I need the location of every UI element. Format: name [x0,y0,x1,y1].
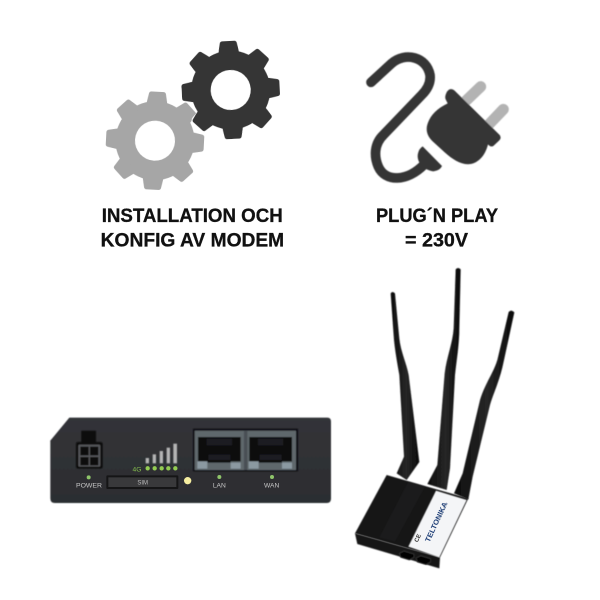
heading: plug and play: = 230V [405,230,468,252]
SIM slot [106,475,178,489]
label POWER: POWER [76,483,102,490]
cord end cap [418,146,442,171]
power connector [76,431,103,469]
white label [408,491,467,557]
router housing top [355,475,468,557]
plug prongs [465,87,503,125]
WAN LED and label: WAN [264,483,279,490]
ports on front [399,551,431,565]
icon: power plug with cord [371,57,503,178]
4G indicator LEDs: 4G [133,466,141,473]
router housing side [355,533,440,568]
heading: installation: INSTALLATION OCH [102,206,283,227]
plug body [427,89,501,164]
white label: TELTONIKA [423,500,450,544]
WAN LED and label [264,475,279,490]
4G indicator LEDs [133,466,177,473]
power LED [87,475,91,479]
LAN LED and label [213,475,226,490]
heading: installation: KONFIG AV MODEM [101,230,284,252]
icon: dark gear [178,39,282,143]
status LED yellow [184,477,191,484]
ethernet ports [193,429,298,471]
signal strength bars [146,444,177,463]
heading: plug and play: PLUG´N PLAY [376,206,498,227]
white label: CE [414,533,423,544]
heading: installation [101,206,284,252]
antenna right [454,311,514,499]
router front panel [50,418,331,503]
antenna left [391,292,419,480]
antenna middle [427,268,461,490]
LAN LED and label: LAN [213,483,226,490]
SIM slot: SIM [137,480,148,486]
white label: Industrial cellular [436,502,449,524]
cord [371,57,430,178]
router with three antennas [355,268,514,568]
panel body [50,418,331,503]
heading: plug and play [376,206,498,252]
icon: gray gear [104,89,206,192]
